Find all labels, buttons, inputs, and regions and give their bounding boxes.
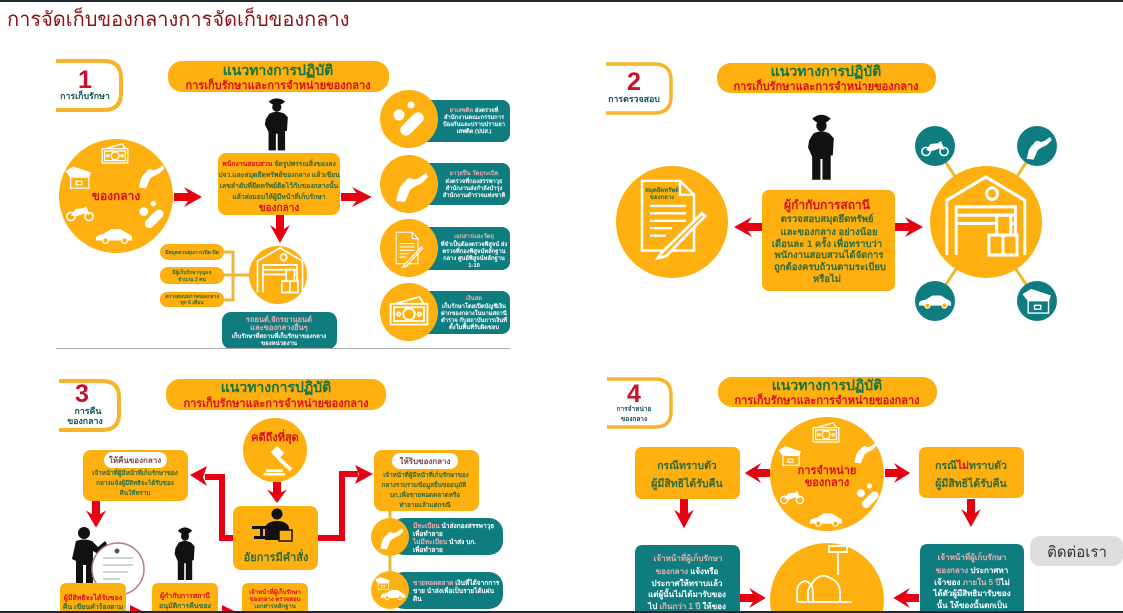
arrow to box [174,187,202,207]
item: auction [371,571,503,609]
officer [175,527,195,580]
item: cash: เก็บรักษาโดยเปิดบัญชีเงิน [442,301,506,310]
officer [808,115,834,180]
left elbow arrow [190,466,233,538]
box: return evidence [83,450,188,501]
circle: final verdict [243,418,307,482]
header 4: การเก็บรักษาและการจำหน่ายของกลาง [734,393,920,407]
box: claimant [60,583,126,613]
top page edge [0,0,1123,2]
item: destroy firearm: ไม่มีทะเบียน นำส่ง บก. [412,537,476,546]
warehouse rules [160,244,250,307]
header 1: แนวทางการปฏิบัติ [223,62,333,79]
item: firearms: สำนักงานตำรวจแห่งชาติ [443,191,505,199]
tab 3: ของกลาง [67,416,103,426]
teal box right: เจ้าหน้าที่ผู้เก็บรักษา [938,551,1006,563]
document circle: สมุดยึดทรัพย์ [645,186,679,194]
panel 3: return [59,379,503,613]
tab 1 [56,61,121,110]
box: known claimant [635,447,740,499]
box: superintendent: พนักงานสอบสวนได้จัดการ [774,249,884,261]
contact button: ติดต่อเรา [1047,544,1107,561]
header 2: แนวทางการปฏิบัติ [771,63,881,80]
box: known claimant: ผู้มีสิทธิได้รับคืน [651,477,724,491]
header 4: แนวทางการปฏิบัติ [772,377,882,394]
arrow left [745,463,770,483]
header 2: การเก็บรักษาและการจำหน่ายของกลาง [733,79,919,93]
item: cash: ตำรวจ กับสถาบันการเงินที่ [441,315,507,324]
item: auction: ขายทอดตลาด เงินที่ได้จากการ [413,577,500,587]
box: confiscate: ให้ริบของกลาง [400,456,451,466]
teal box right: นั้น ให้ของนั้นตกเป็น [937,599,1008,610]
item: firearms: อาวุธปืน วัตถุระเบิด [450,169,499,177]
tab 3 [59,380,119,430]
center circle [770,417,884,531]
item: documents [380,219,510,277]
arrow right [341,187,372,207]
document circle: ของกลาง [650,194,674,201]
item: auction: ดิน [413,595,422,603]
panel 1: storage [56,61,510,349]
box: officer checks: เอกสารหลักฐาน [254,602,297,610]
box: superintendent: ตรวจสอบสมุดยึดทรัพย์ [781,213,873,225]
box: unknown claimant: กรณีไม่ทราบตัว [935,459,1007,472]
small arrows [130,605,234,613]
teal box: vehicles: รถยนต์,จักรยานยนต์ [246,315,312,324]
arrow down left [674,499,694,528]
teal box: vehicles: ของหน่วยงาน [261,340,298,347]
right elbow arrow [318,465,373,538]
item: drugs: เสพติด (ปปส.) [457,127,491,135]
teal box left: ประกาศให้ทราบแล้ว [652,578,723,588]
warehouse circle [249,246,307,304]
tab 3: การคืน [75,405,101,416]
item: destroy firearm: เพื่อทำลาย [413,544,443,554]
header 1: การเก็บรักษาและการจำหน่ายของกลาง [185,78,371,92]
box: superintendent [762,190,895,291]
teal box: vehicles [222,312,337,349]
center circle: ของกลาง [805,477,849,489]
officer [265,98,288,150]
header 3: การเก็บรักษาและการจำหน่ายของกลาง [183,396,369,410]
connector line [388,511,392,609]
item: documents: 1-10 [468,263,480,269]
center circle: การจำหน่าย [798,464,856,477]
box: superintendent: เดือนละ 1 ครั้ง เพื่อทราบว่า [772,236,882,250]
header 3 [166,379,386,410]
circle: evidence items: ของกลาง [92,189,140,203]
item: drugs: ยาเสพติด ส่งตรวจที่ [450,105,499,114]
tab 4: 4 [627,380,641,408]
item: firearms [380,155,510,213]
box: unknown claimant [919,447,1024,498]
arrow right into circle [740,588,766,608]
box: superintendent approves: ผู้กำกับการสถานี [160,591,210,601]
teal box right: ของกลาง ประกาศหา [936,566,1008,575]
header 4 [718,377,937,407]
teal box: vehicles: เก็บรักษาที่สถานที่เก็บรักษาของกลาง [232,331,326,340]
contact button [1030,536,1123,566]
box: officer checks: เจ้าหน้าที่ผู้เก็บรักษา [249,587,301,597]
box: investigator duties [218,153,340,215]
header 1 [168,61,389,92]
box: superintendent: ผู้กำกับการสถานี [784,198,871,213]
box: confiscate: เจ้าหน้าที่ผู้มีหน้าที่เก็บรักษาของ [383,470,469,480]
panel 2: inspection [606,63,1057,321]
item: destroy firearm [371,518,503,556]
box: confiscate [374,450,479,511]
baseline rule [56,348,510,349]
warehouse rules: ตรวจสอบสภาพของกลาง [165,294,219,300]
box: prosecutor [233,506,318,570]
arrow left [734,217,762,237]
item: cash: ฝากของกลางในนามสถานี [441,309,507,317]
item: cash: เงินสด [466,294,482,302]
box: known claimant: กรณีทราบตัว [657,459,717,472]
box: officer checks [242,583,308,613]
arrow right [885,463,910,483]
warehouse rules: จำนวน 3 คน [178,276,206,283]
arrow down [270,215,290,243]
arrow down right [961,499,981,527]
teal box right: เจ้าของ ภายใน 5 ปีไม่ [934,577,1010,587]
bottom circle [770,543,884,613]
item: drugs: สำนักงานคณะกรรมการ [444,113,505,121]
item: documents: กลาง ศูนย์พิสูจน์หลักฐาน [443,254,505,263]
arrow down [267,482,287,503]
warehouse rules: มีผู้เก็บรักษากุญแจ [172,268,212,277]
box: prosecutor: อัยการมีคำสั่ง [244,549,308,564]
box: return evidence: ให้คืนของกลาง [109,455,161,465]
item: cash [380,283,510,341]
tab 2: 2 [627,68,641,96]
box: superintendent approves [152,583,218,613]
box: confiscate: บก.เพื่อขายทอดตลาดหรือ [390,490,460,499]
person with form [72,527,144,595]
box: investigator duties: พนักงานสอบสวน จัดรูปพรรณสิ่งของลง [221,158,336,169]
teal box left [635,545,740,613]
item: documents: เอกสารและวัตถุ [454,232,494,240]
panel 4: disposal [607,377,1024,613]
teal box left: แต่ผู้นั้นไม่ได้มารับของ [648,588,726,600]
bottom page edge [0,611,1123,613]
item: drugs: ป้องกันและปราบปรามยา [443,120,505,128]
box: investigator duties: แล้วส่งมอบให้ผู้มีหน้าที่เก็บรักษา [232,191,326,202]
box: claimant: คืน เขียนคำร้องตาม [63,602,124,611]
teal box right: ได้ตัวผู้มีสิทธิมารับของ [932,588,1011,599]
title: การจัดเก็บของกลางการจัดเก็บของกลาง [7,6,349,31]
warehouse rules: มีสมุดควบคุมการเปิด-ปิด [165,249,219,256]
item: firearms: สำนักงานส่งกำลังบำรุง [446,184,503,192]
item: firearms: ส่งตรวจที่กองสรรพาวุธ [445,176,503,185]
box: investigator duties: เลขลำดับที่ยึดทรัพย์ติดไว้กับของกลางนั้น [220,180,339,190]
box: superintendent approves: อนุมัติการคืนของ [159,602,212,610]
tab 1: 1 [78,66,92,94]
circle: evidence items [59,139,173,253]
box: superintendent: หรือไม่ [813,273,841,285]
box: return evidence: กลางแจ้งผู้มีสิทธิจะได้รับของ [96,478,174,488]
box: officer checks: ของกลาง ตรวจสอบ [250,596,301,603]
item: destroy firearm: เพื่อทำลาย [413,528,443,538]
tab 4: การจำหน่าย [617,405,652,413]
tab 4: ของกลาง [621,416,647,423]
box: investigator duties: ปจว.และสมุดยึดทรัพย์ของกลาง แล้วเขียน [218,170,340,179]
box: return evidence: คืนให้ทราบ [120,488,150,497]
box: superintendent: และของกลาง อย่างน้อย [780,226,878,238]
teal box: vehicles: และของกลางอื่นๆ [250,321,308,332]
tab 3: 3 [75,380,89,408]
teal box left: เจ้าหน้าที่ผู้เก็บรักษา [654,552,722,564]
item: destroy firearm: มีทะเบียน นำส่งกองสรรพาวุธ [413,522,494,530]
tab 1: การเก็บรักษา [60,89,110,101]
warehouse rules: ทุก 6 เดือน [180,299,204,306]
item: documents: ที่จำเป็นต้องตรวจพิสูจน์ ส่ง [441,239,507,249]
box: investigator duties: ของกลาง [259,203,299,214]
box: unknown claimant: ผู้มีสิทธิได้รับคืน [935,477,1008,491]
item: auction: ขาย นำส่งเพื่อเป็นรายได้แผ่น [413,585,495,595]
tab 4 [607,379,671,427]
document circle [616,166,728,278]
warehouse hub [915,126,1057,321]
box: confiscate: ทำลายแล้วแต่กรณี [399,500,451,509]
arrow left into circle [893,588,919,608]
box: confiscate: กลางรวบรวมข้อมูลยื่นขออนุมัติ [382,480,466,490]
item: documents: ตรวจที่กองพิสูจน์หลักฐาน [442,246,506,256]
circle: final verdict: คดีถึงที่สุด [251,429,299,445]
arrow right [895,217,923,237]
box: claimant: ผู้มีสิทธิจะได้รับของ [64,593,123,603]
header 3: แนวทางการปฏิบัติ [221,379,331,396]
item: drugs [380,90,510,148]
tab 2 [606,64,671,113]
teal box left: ของกลาง แจ้งหรือ [656,566,719,576]
tab 2: การตรวจสอบ [608,94,660,104]
item: cash: ตั้งในพื้นที่รับผิดชอบ [449,322,499,331]
header 2 [717,63,936,93]
box: return evidence: เจ้าหน้าที่ผู้มีหน้าที่เก็บรักษาของ [92,468,178,478]
teal box left: ไป เกินกว่า 1 ปี ให้ของ [647,601,726,611]
teal box right [920,544,1024,613]
box: superintendent: ถูกต้องครบถ้วนตามระเบียบ [774,261,886,274]
arrow down [86,501,106,528]
